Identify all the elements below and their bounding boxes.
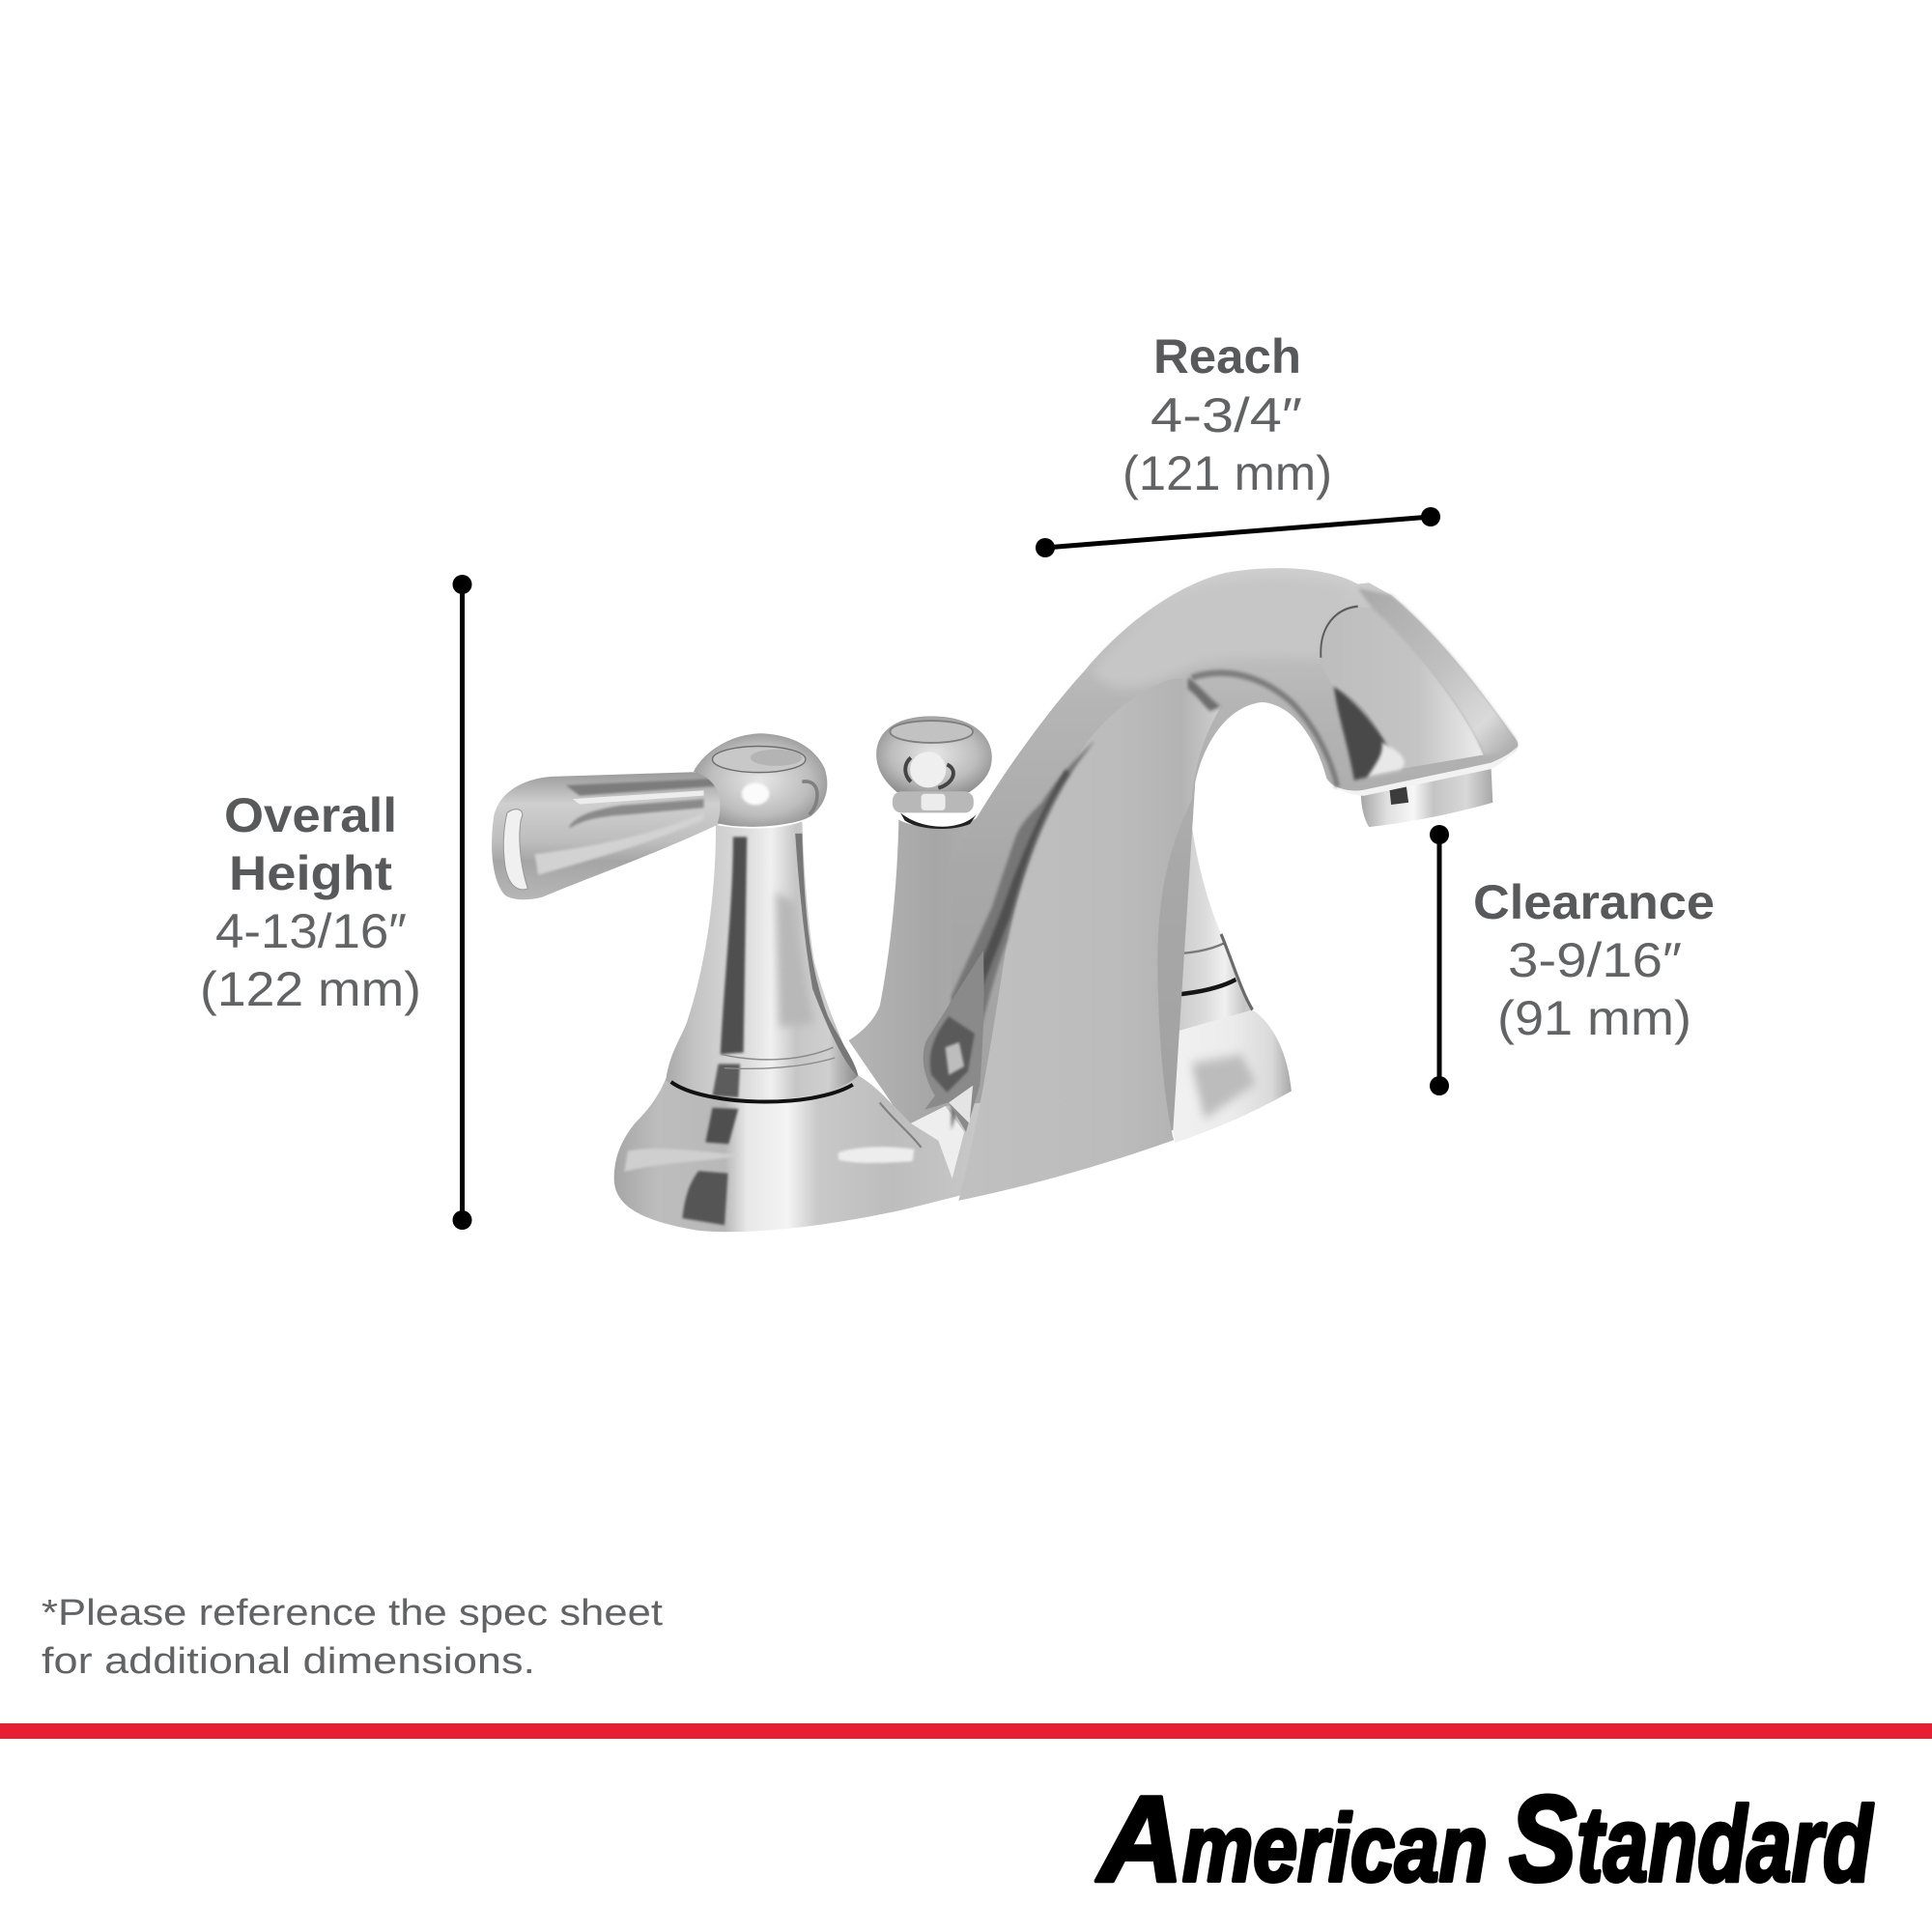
right handle behind the spout (1144, 791, 1292, 1143)
rear valve body (849, 764, 1024, 1161)
reach line (1036, 507, 1440, 557)
reach label: (121 mm) (1122, 446, 1332, 500)
wedge lower reflection (923, 951, 984, 1132)
clearance label: (91 mm) (1497, 991, 1691, 1045)
footnote (42, 1593, 664, 1682)
dimension: overall height (200, 575, 471, 1230)
American Standard logo: merican (1182, 1795, 1488, 1901)
wedge left dark strip (952, 740, 1095, 1130)
lever hub dome (694, 733, 827, 827)
lever end highlight (503, 810, 527, 890)
American Standard logo (1095, 1771, 1874, 1907)
clearance label (1473, 875, 1715, 1045)
left base plate (614, 1075, 983, 1232)
wedge top rim shadow (1188, 678, 1221, 711)
overall height label: Overall (224, 788, 397, 842)
clearance label: Clearance (1473, 875, 1715, 929)
American Standard logo: S (1509, 1771, 1577, 1907)
lever reflections (566, 779, 718, 796)
overall height label: (122 mm) (200, 962, 421, 1016)
clearance line (1430, 825, 1449, 1095)
spray head face (1321, 607, 1484, 770)
clearance label: 3-9/16″ (1508, 933, 1682, 987)
aerator nozzle (1361, 765, 1492, 827)
overall height label: Height (229, 846, 392, 900)
reach label: Reach (1153, 329, 1301, 384)
spray head outer band (1358, 588, 1517, 754)
lever handle (492, 772, 728, 899)
left handle (492, 733, 859, 1102)
American Standard logo: A (1095, 1771, 1183, 1907)
overall height line (452, 575, 471, 1230)
footnote: for additional dimensions. (42, 1641, 535, 1682)
footnote: *Please reference the spec sheet (42, 1593, 664, 1634)
overall height label (200, 788, 421, 1016)
overall height label: 4-13/16″ (215, 904, 407, 958)
column dark streaks (721, 837, 747, 1054)
centre pop-up knob (876, 716, 992, 829)
spray head dark reflection (1334, 687, 1399, 781)
arch band under spout (1191, 673, 1338, 787)
dimension: reach (1036, 329, 1440, 557)
reach label: 4-3/4″ (1151, 388, 1302, 442)
dimension: clearance (1430, 825, 1715, 1095)
faucet illustration (492, 568, 1518, 1232)
red divider bar (0, 1723, 1932, 1739)
left handle column (666, 821, 857, 1100)
left handle black ring (671, 1082, 853, 1102)
spout upper highlight (1092, 578, 1350, 688)
reach label (1122, 329, 1332, 500)
base highlights (838, 1147, 914, 1163)
front wedge of the spout (952, 678, 1221, 1201)
spout arc (952, 568, 1518, 1175)
